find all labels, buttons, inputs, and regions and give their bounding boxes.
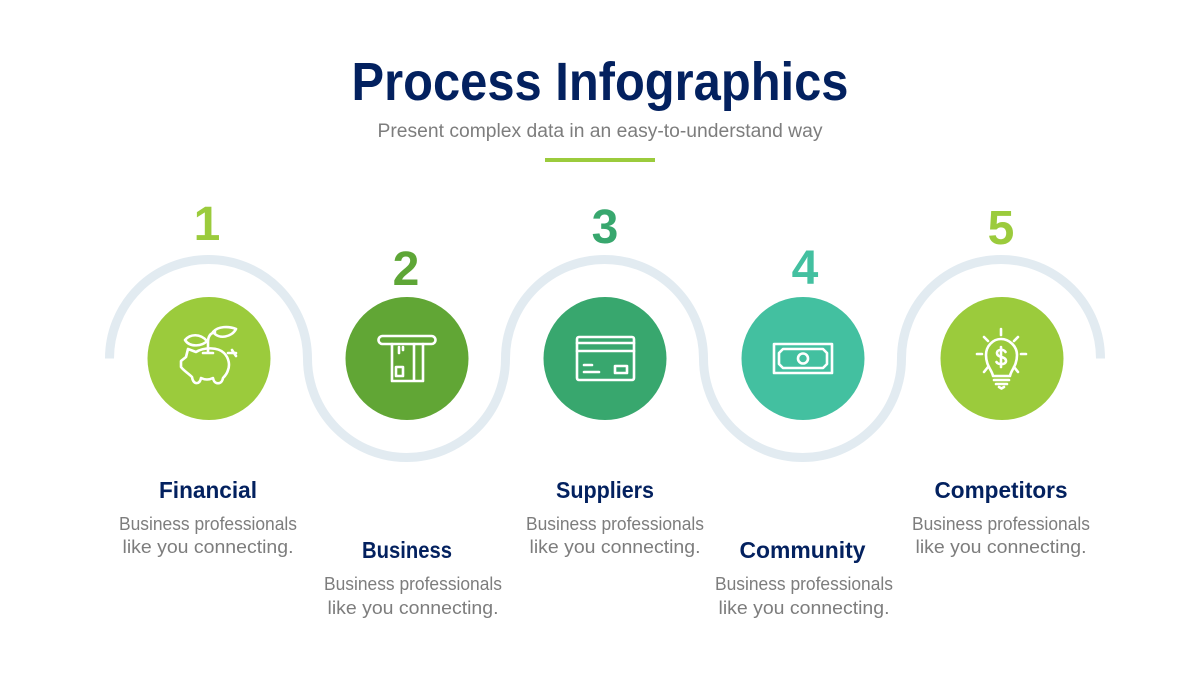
title: Process Infographics <box>352 52 848 112</box>
circle 3 <box>544 297 666 420</box>
icon: piggy bank with sprout <box>181 327 236 383</box>
description: like you connecting. <box>916 536 1086 557</box>
step 3: suppliers <box>526 201 704 557</box>
heading: Community <box>740 537 866 563</box>
heading: Suppliers <box>556 477 654 503</box>
heading: Business <box>362 537 452 563</box>
circle 2 <box>346 297 468 420</box>
description <box>526 514 704 557</box>
icon: banknote <box>774 344 832 373</box>
number 2: 2 <box>393 243 419 296</box>
circle 4 <box>742 297 864 420</box>
icon: light bulb with dollar sign <box>977 329 1026 388</box>
description <box>715 574 893 618</box>
description: like you connecting. <box>122 536 294 557</box>
description: Business professionals <box>912 514 1090 534</box>
circle 1 <box>148 297 270 420</box>
step 4: community <box>715 242 893 618</box>
step 2: business <box>324 243 502 618</box>
circle 5 <box>940 297 1064 420</box>
description: Business professionals <box>715 574 893 594</box>
number 1: 1 <box>194 198 220 251</box>
icon: credit card <box>577 337 634 380</box>
wavy connector line <box>110 260 1100 458</box>
title underline <box>545 158 655 162</box>
number 3: 3 <box>592 201 618 254</box>
subtitle: Present complex data in an easy-to-understand way <box>378 121 823 142</box>
description: Business professionals <box>324 574 502 594</box>
description: like you connecting. <box>530 536 700 557</box>
description <box>119 514 297 557</box>
description <box>324 574 502 618</box>
step 5: competitors <box>912 202 1090 557</box>
description: Business professionals <box>119 514 297 534</box>
heading: Competitors <box>934 477 1068 503</box>
heading: Financial <box>159 477 257 503</box>
icon: card in ATM slot <box>378 336 436 381</box>
description <box>912 514 1090 557</box>
description: like you connecting. <box>328 597 498 618</box>
number 4: 4 <box>792 242 819 295</box>
description: Business professionals <box>526 514 704 534</box>
description: like you connecting. <box>718 597 890 618</box>
step 1: financial <box>119 198 297 557</box>
number 5: 5 <box>988 202 1014 255</box>
